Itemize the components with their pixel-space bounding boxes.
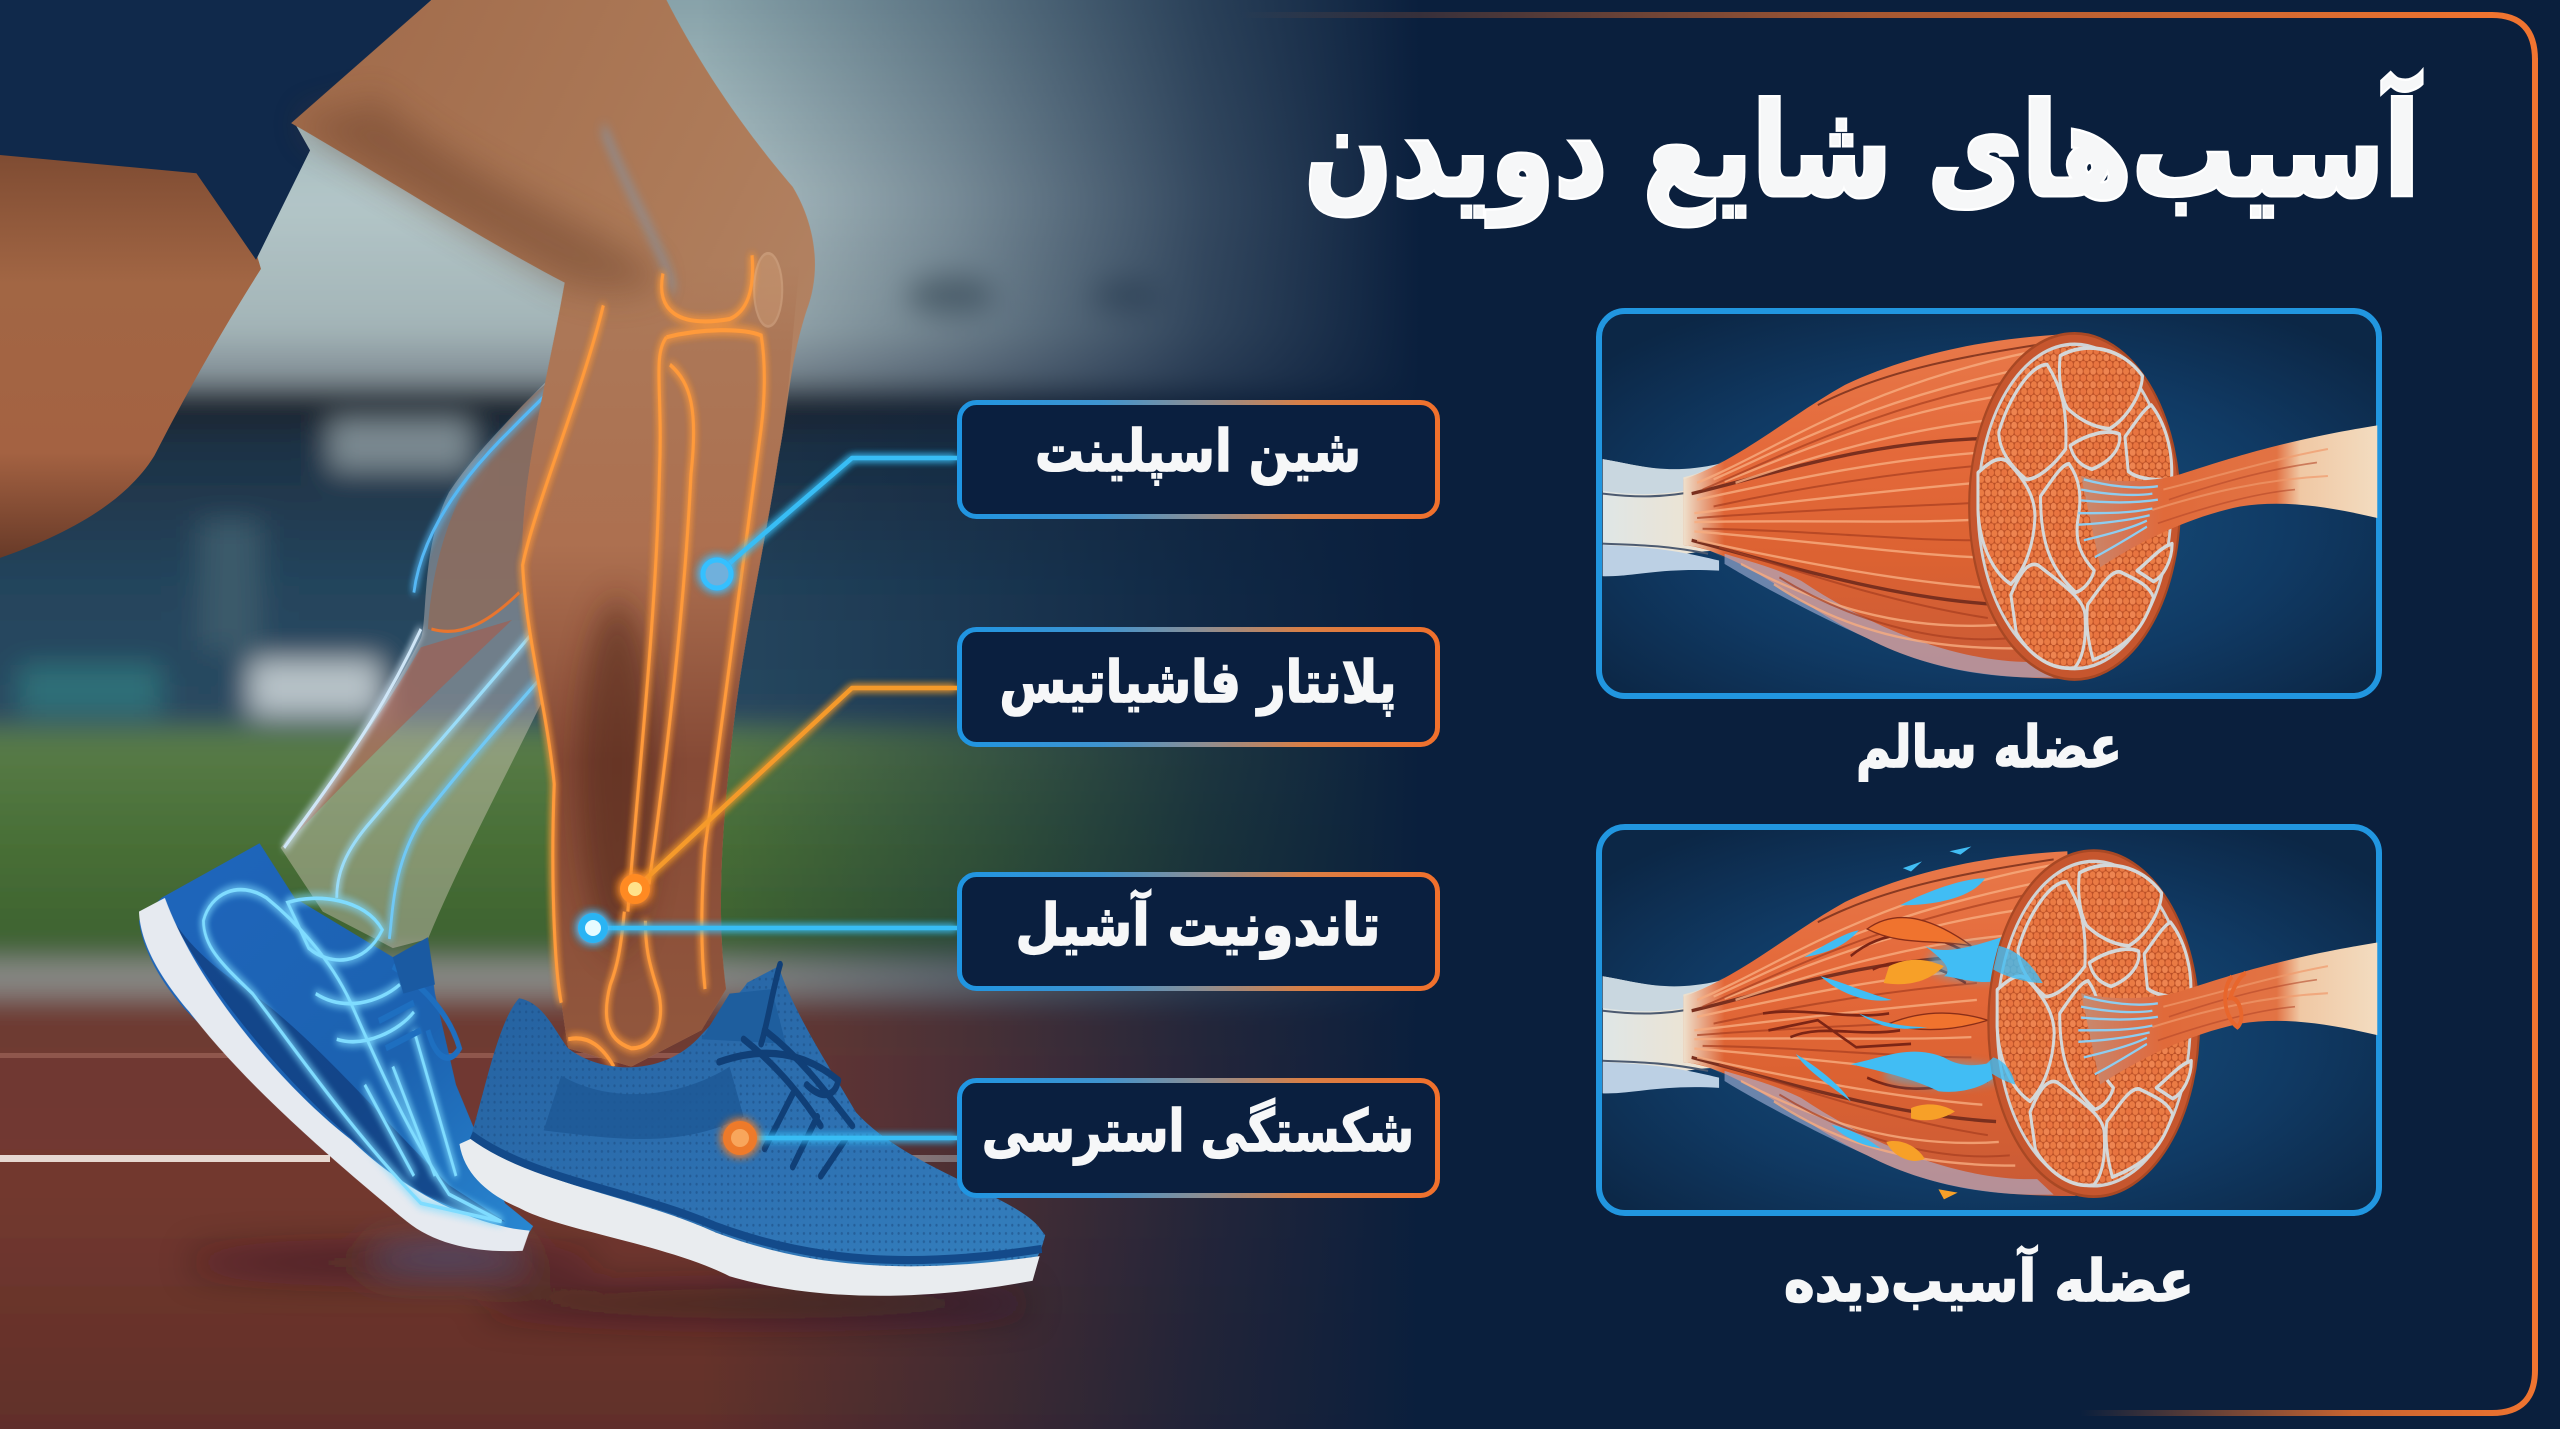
label: achilles tendinitis: تاندونیت آشیل (1016, 889, 1380, 960)
glowing bones and knee joint (523, 255, 764, 1067)
dot achilles (578, 913, 608, 943)
label: plantar fasciitis: پلانتار فاشیاتیس (1000, 648, 1396, 717)
label: stress fracture (960, 1080, 1438, 1196)
label: stress fracture: شکستگی استرسی (982, 1097, 1414, 1166)
panel: damaged muscle (1599, 827, 2379, 1213)
connector shin splint (717, 458, 957, 574)
blue tear over cross-section (1982, 946, 2043, 1084)
label: shin splint: شین اسپلینت (1035, 417, 1361, 486)
damaged muscle illustration (1603, 846, 2377, 1199)
panel: healthy muscle (1599, 311, 2379, 696)
healthy muscle illustration (1603, 333, 2377, 680)
label: plantar fasciitis (960, 630, 1438, 744)
runner illustration (0, 0, 1045, 1320)
dot fracture (723, 1121, 757, 1155)
back thigh skin (0, 137, 261, 558)
back shoe with foot x-ray (139, 843, 533, 1251)
ghost back leg (281, 310, 751, 948)
shorts (0, 0, 431, 260)
panel frame (1240, 15, 2535, 1413)
front leg (291, 0, 815, 1067)
label: shin splint (960, 402, 1438, 516)
front shoe (459, 964, 1045, 1296)
caption: damaged muscle: عضله آسیب‌دیده (1784, 1245, 2194, 1315)
right navy panel background (560, 0, 2560, 1429)
ground shadow (182, 1247, 1038, 1320)
dot plantar (620, 874, 650, 904)
hotspot dots (578, 557, 757, 1155)
caption: healthy muscle: عضله سالم (1856, 713, 2122, 781)
connector stress fracture (740, 1136, 957, 1140)
dot shin (700, 557, 734, 591)
connector achilles (593, 926, 957, 930)
label: achilles tendinitis (960, 874, 1438, 988)
connectors to labels (593, 458, 957, 1138)
connector plantar fasciitis (635, 688, 957, 889)
tears in fibres (1763, 846, 2026, 1199)
tendon tear ring (2225, 973, 2246, 1027)
